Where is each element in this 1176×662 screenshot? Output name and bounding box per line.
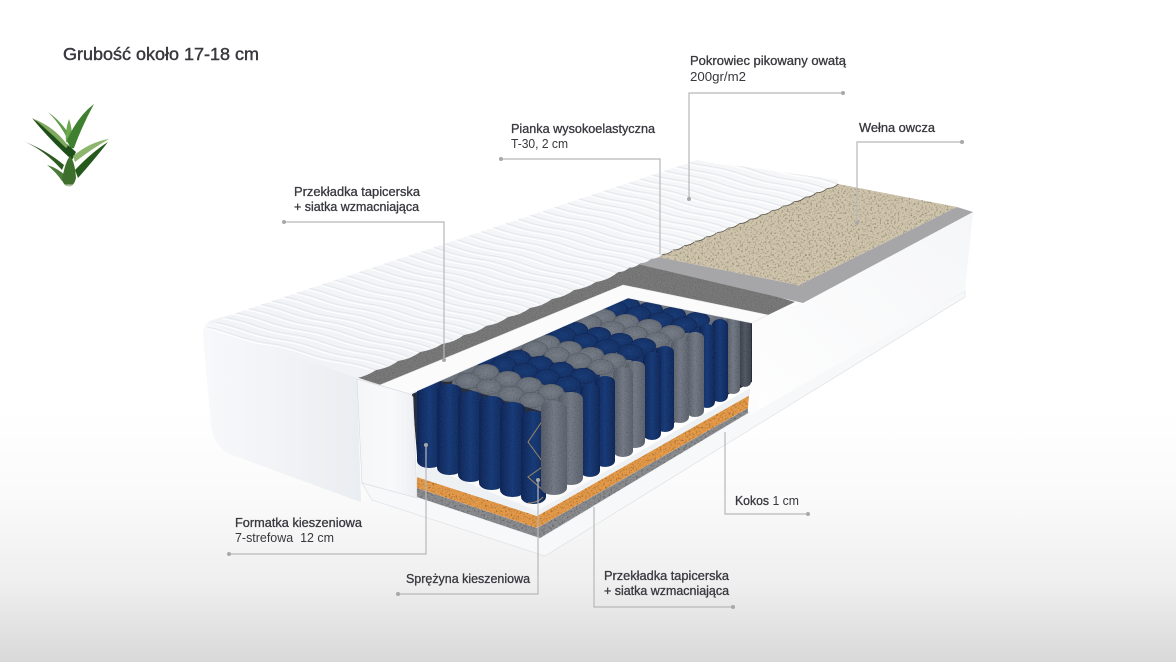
base layer — [362, 291, 965, 556]
label: Kokos 1 cm: Kokos 1 cm — [735, 494, 799, 508]
label: Pokrowiec pikowany owatą — [687, 54, 846, 201]
label: Wełna owcza — [855, 121, 964, 225]
right cut edge — [751, 322, 760, 415]
quilted cover — [207, 160, 838, 378]
label: Przekładka tapicerska, top: + siatka wzmacniająca — [294, 200, 419, 214]
label: Formatka kieszeniowa: Formatka kieszeniowa — [235, 516, 362, 530]
label: Przekładka tapicerska, bottom — [594, 507, 735, 609]
label: Sprężyna kieszeniowa — [396, 478, 540, 596]
white floor under springs — [417, 388, 750, 516]
label: Sprężyna kieszeniowa: Sprężyna kieszeniowa — [406, 572, 530, 586]
label: Formatka kieszeniowa — [227, 443, 428, 556]
label: Pianka wysokoelastyczna: Pianka wysokoelastyczna — [511, 122, 655, 136]
title: Grubość około 17-18 cm — [63, 44, 259, 64]
wool layer — [658, 184, 957, 286]
label: Formatka kieszeniowa: 7-strefowa 12 cm — [235, 531, 334, 545]
label: Pianka wysokoelastyczna — [499, 122, 660, 254]
spring block contents — [412, 290, 752, 504]
mattress cross-section — [196, 135, 973, 556]
cut line shadow on wool — [662, 184, 838, 254]
label: Wełna owcza: Wełna owcza — [859, 121, 935, 135]
icon: aloe plant — [25, 104, 109, 191]
label: Przekładka tapicerska, bottom: + siatka wzmacniająca — [604, 584, 729, 598]
upholstery layer: lower felt — [417, 408, 748, 538]
mattress front face — [203, 323, 361, 502]
cover quilting ridges — [206, 162, 838, 372]
label: Przekładka tapicerska, top: Przekładka tapicerska — [294, 185, 420, 199]
dark foam layer — [350, 255, 795, 385]
white foam frame — [356, 285, 768, 394]
label: Pianka wysokoelastyczna: T-30, 2 cm — [511, 137, 568, 151]
label: Przekładka tapicerska, bottom: Przekładka tapicerska — [604, 569, 729, 583]
light grey slab — [633, 207, 973, 303]
label: Pokrowiec pikowany owatą: 200gr/m2 — [690, 70, 746, 84]
front foam wall — [357, 379, 417, 498]
label: Przekładka tapicerska, top — [282, 185, 446, 362]
label: Pokrowiec pikowany owatą: Pokrowiec pikowany owatą — [690, 54, 846, 68]
label: Kokos 1 cm — [725, 432, 810, 516]
right side face — [750, 212, 973, 415]
coconut layer — [417, 395, 749, 528]
pocket springs block — [412, 290, 752, 504]
